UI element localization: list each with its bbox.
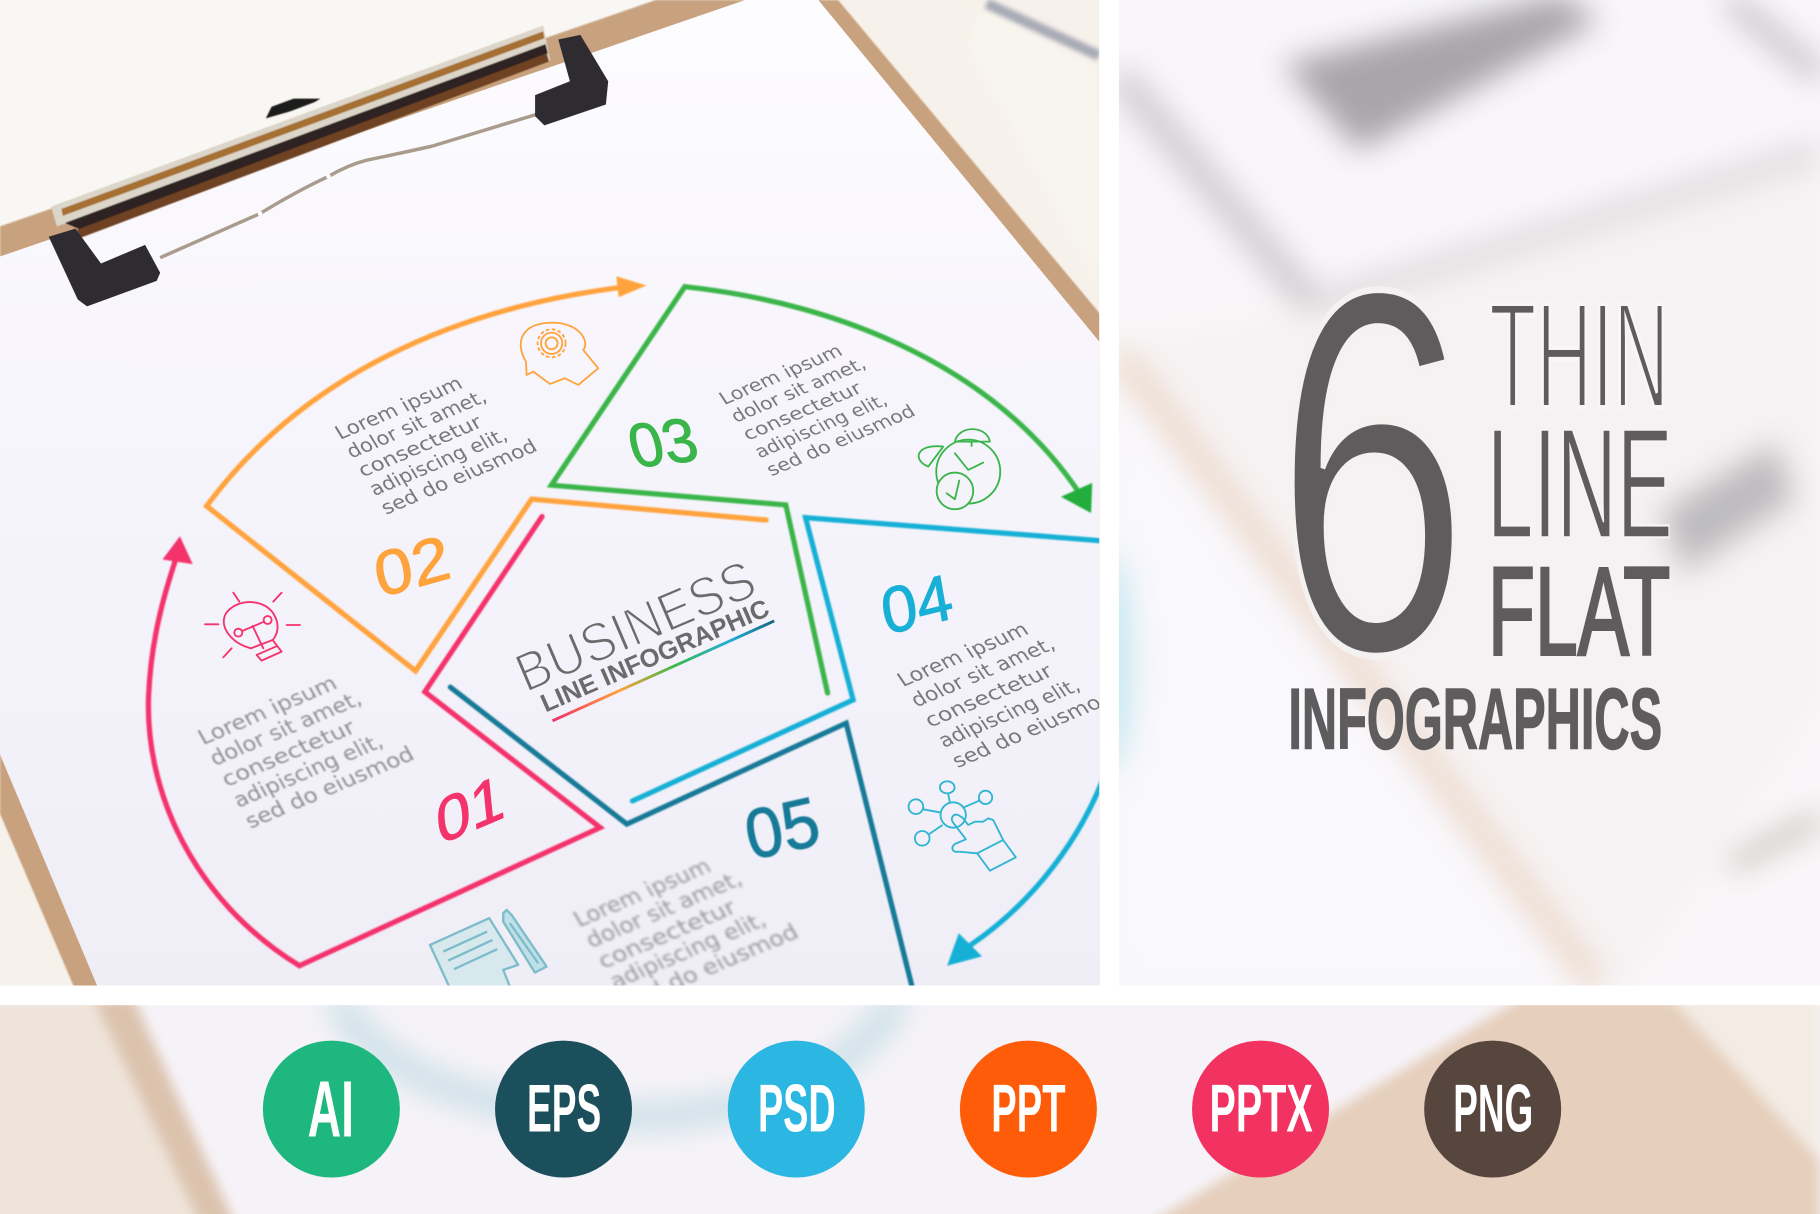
- segment 03 outline: [551, 287, 1092, 693]
- step numbers: 05: [738, 782, 826, 875]
- icon: notepad and pencil: [430, 910, 547, 988]
- text block 04: [896, 626, 1100, 768]
- segment 01 outline: [148, 517, 600, 966]
- text block 05: sed do eiusmod: [618, 920, 803, 1015]
- text block 05: adipiscing elit,: [606, 908, 771, 995]
- step numbers: 03: [621, 405, 705, 481]
- text block 02: consectetur: [354, 411, 487, 482]
- segment 05 outline: [450, 687, 913, 992]
- badge: PPT: PPT: [991, 1072, 1066, 1147]
- badge: PSD: [728, 1041, 865, 1178]
- text block 01: Lorem ipsum: [194, 671, 342, 750]
- panel: clipboard photo: [0, 0, 1118, 1045]
- heading: flat: FLAT: [1488, 542, 1670, 682]
- text block 01: consectetur: [217, 715, 360, 792]
- badge: EPS: [495, 1041, 632, 1178]
- text block 04: adipiscing elit,: [933, 674, 1085, 752]
- text block 03: [718, 348, 915, 476]
- text block 04: consectetur: [920, 659, 1058, 732]
- icon: alarm clock: [919, 429, 1000, 509]
- text block 04: dolor sit amet,: [906, 632, 1059, 712]
- badge: PSD: PSD: [758, 1072, 836, 1147]
- step numbers: [368, 405, 958, 875]
- text block 01: dolor sit amet,: [206, 687, 366, 771]
- heading: number six: 6: [1274, 182, 1469, 761]
- segment 04 outline: [633, 518, 1103, 966]
- text block 02: dolor sit amet,: [342, 385, 491, 463]
- step numbers: 02: [368, 522, 456, 612]
- paper sheet: [0, 0, 1114, 1045]
- badge: PNG: PNG: [1453, 1072, 1533, 1147]
- step numbers: 04: [876, 560, 958, 649]
- text block 04: Lorem ipsum: [892, 618, 1033, 691]
- text block 02: adipiscing elit,: [365, 424, 512, 500]
- text block 03: sed do eiusmod: [763, 402, 920, 481]
- text block 05: Lorem ipsum: [570, 854, 716, 933]
- badge: PPTX: PPTX: [1209, 1072, 1313, 1147]
- icon: network touch hand: [909, 781, 1016, 871]
- text block 03: adipiscing elit,: [751, 390, 892, 463]
- text block 01: adipiscing elit,: [229, 729, 388, 813]
- text block 01: [197, 678, 414, 829]
- text block 04: sed do eiusmod: [947, 685, 1118, 772]
- text block 05: [572, 861, 800, 986]
- center title: business line infographic: BUSINESS: [507, 549, 764, 704]
- text block 03: Lorem ipsum: [715, 341, 847, 409]
- badge: AI: [263, 1041, 400, 1178]
- text block 02: sed do eiusmod: [377, 435, 541, 519]
- clipboard board: [0, 0, 1114, 1045]
- transparent ruler at the top right: [963, 0, 1099, 290]
- text block 02: [334, 380, 537, 514]
- panel: format badges strip: [0, 998, 1820, 1214]
- icon: head with gear: [521, 323, 598, 385]
- metal clip: [49, 26, 608, 306]
- badge: PPT: [960, 1041, 1097, 1178]
- text block 03: consectetur: [739, 378, 866, 445]
- text block 03: dolor sit amet,: [727, 354, 870, 427]
- diagram: segmented circle: [148, 276, 1103, 992]
- text block 05: consectetur: [594, 895, 742, 974]
- panel: blurred right background: [1091, 0, 1820, 985]
- badge: PNG: [1424, 1041, 1561, 1178]
- badge: PPTX: [1192, 1041, 1329, 1178]
- segment 02 outline: [207, 276, 766, 671]
- icon: light bulb: [205, 593, 300, 661]
- center title: business line infographic: LINE INFOGRAPHIC: [537, 594, 774, 718]
- badge: AI: AI: [308, 1064, 354, 1153]
- text block 01: sed do eiusmod: [241, 742, 419, 834]
- step numbers: 01: [433, 761, 507, 859]
- text block 05: dolor sit amet,: [582, 867, 747, 953]
- text block 02: Lorem ipsum: [331, 372, 467, 444]
- badge: EPS: EPS: [527, 1072, 601, 1147]
